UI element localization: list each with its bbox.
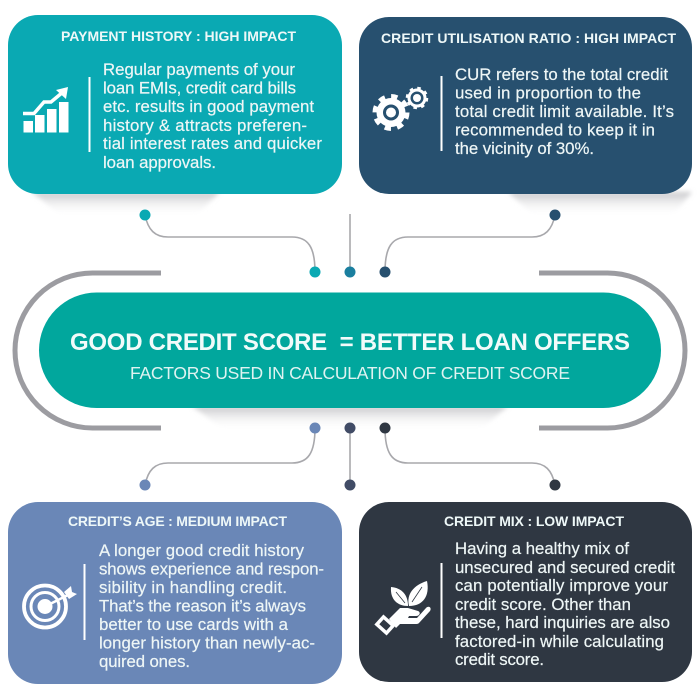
text block: payment history: loan approvals. [103,153,216,172]
text block: credit's age [99,541,324,671]
text block: credit mix [455,539,675,669]
text block: credit's age: A longer good credit history [99,541,305,560]
panel shadow: credit utilisation [508,192,692,216]
text block: credit mix: credit score. [455,650,544,669]
icon: hand holding leaves [377,581,431,633]
connector: centre top [344,214,356,278]
heading: credit's age: CREDIT’S AGE : MEDIUM IMPACT [68,513,287,529]
connector: credit utilisation [380,210,560,278]
left bracket [15,273,161,428]
icon: gears [375,88,427,128]
banner subtitle: FACTORS USED IN CALCULATION OF CREDIT SCORE [130,363,570,383]
right bracket [539,273,685,428]
text block: payment history: Regular payments of your [103,60,295,79]
text block: credit mix: can potentially improve your [455,576,668,595]
text block: credit's age: longer history than newly-ac- [99,634,315,653]
text block: credit utilisation ratio: recommended to keep it in [455,121,655,140]
text block: credit's age: better to use cards with a [99,615,289,634]
heading: payment history: PAYMENT HISTORY : HIGH IMPACT [61,28,296,44]
connector: centre bottom [344,422,356,490]
text block: credit mix: unsecured and secured credit [455,558,675,577]
text block: credit utilisation ratio: the vicinity of 30%. [455,139,594,158]
text block: payment history: etc. results in good payment [103,97,314,116]
connector: payment history [140,210,320,278]
icon: rising bar chart [23,87,68,132]
text block: credit mix: these, hard inquiries are also [455,613,670,632]
icon: target with dart [24,586,77,628]
text block: credit's age: That’s the reason it’s always [99,597,306,616]
divider [440,563,442,638]
connector: credit mix [380,422,560,490]
divider [88,77,90,152]
heading: credit utilisation ratio: CREDIT UTILISATION RATIO : HIGH IMPACT [381,30,676,46]
panel shadow: payment history [32,192,220,216]
panel: credit utilisation ratio [359,17,692,194]
text block: payment history: loan EMIs, credit card bills [103,79,296,98]
text block: payment history: history & attracts preferen- [103,116,307,135]
central banner [39,292,661,408]
divider [440,76,442,151]
text block: credit's age: sibility in handling credit. [99,578,287,597]
text block: payment history [103,60,322,172]
connector: credit's age [140,422,320,490]
text block: credit utilisation ratio: total credit limit available. It’s [455,102,674,121]
text block: credit mix: Having a healthy mix of [455,539,629,558]
text block: credit utilisation ratio: used in proportion to the [455,84,641,103]
banner title: GOOD CREDIT SCORE = BETTER LOAN OFFERS [70,329,630,356]
divider [84,564,86,640]
text block: credit's age: quired ones. [99,652,190,671]
banner shadow [192,406,508,430]
text block: credit mix: factored-in while calculating [455,632,664,651]
text block: payment history: tial interest rates and quicker [103,134,322,153]
text block: credit's age: shows experience and respon- [99,560,324,579]
heading: credit mix: CREDIT MIX : LOW IMPACT [444,513,624,529]
text block: credit utilisation ratio [455,65,674,158]
panel: credit's age [8,502,342,684]
panel: payment history [8,15,342,194]
text block: credit mix: credit score. Other than [455,595,631,614]
panel: credit mix [359,502,692,682]
text block: credit utilisation ratio: CUR refers to the total credit [455,65,668,84]
